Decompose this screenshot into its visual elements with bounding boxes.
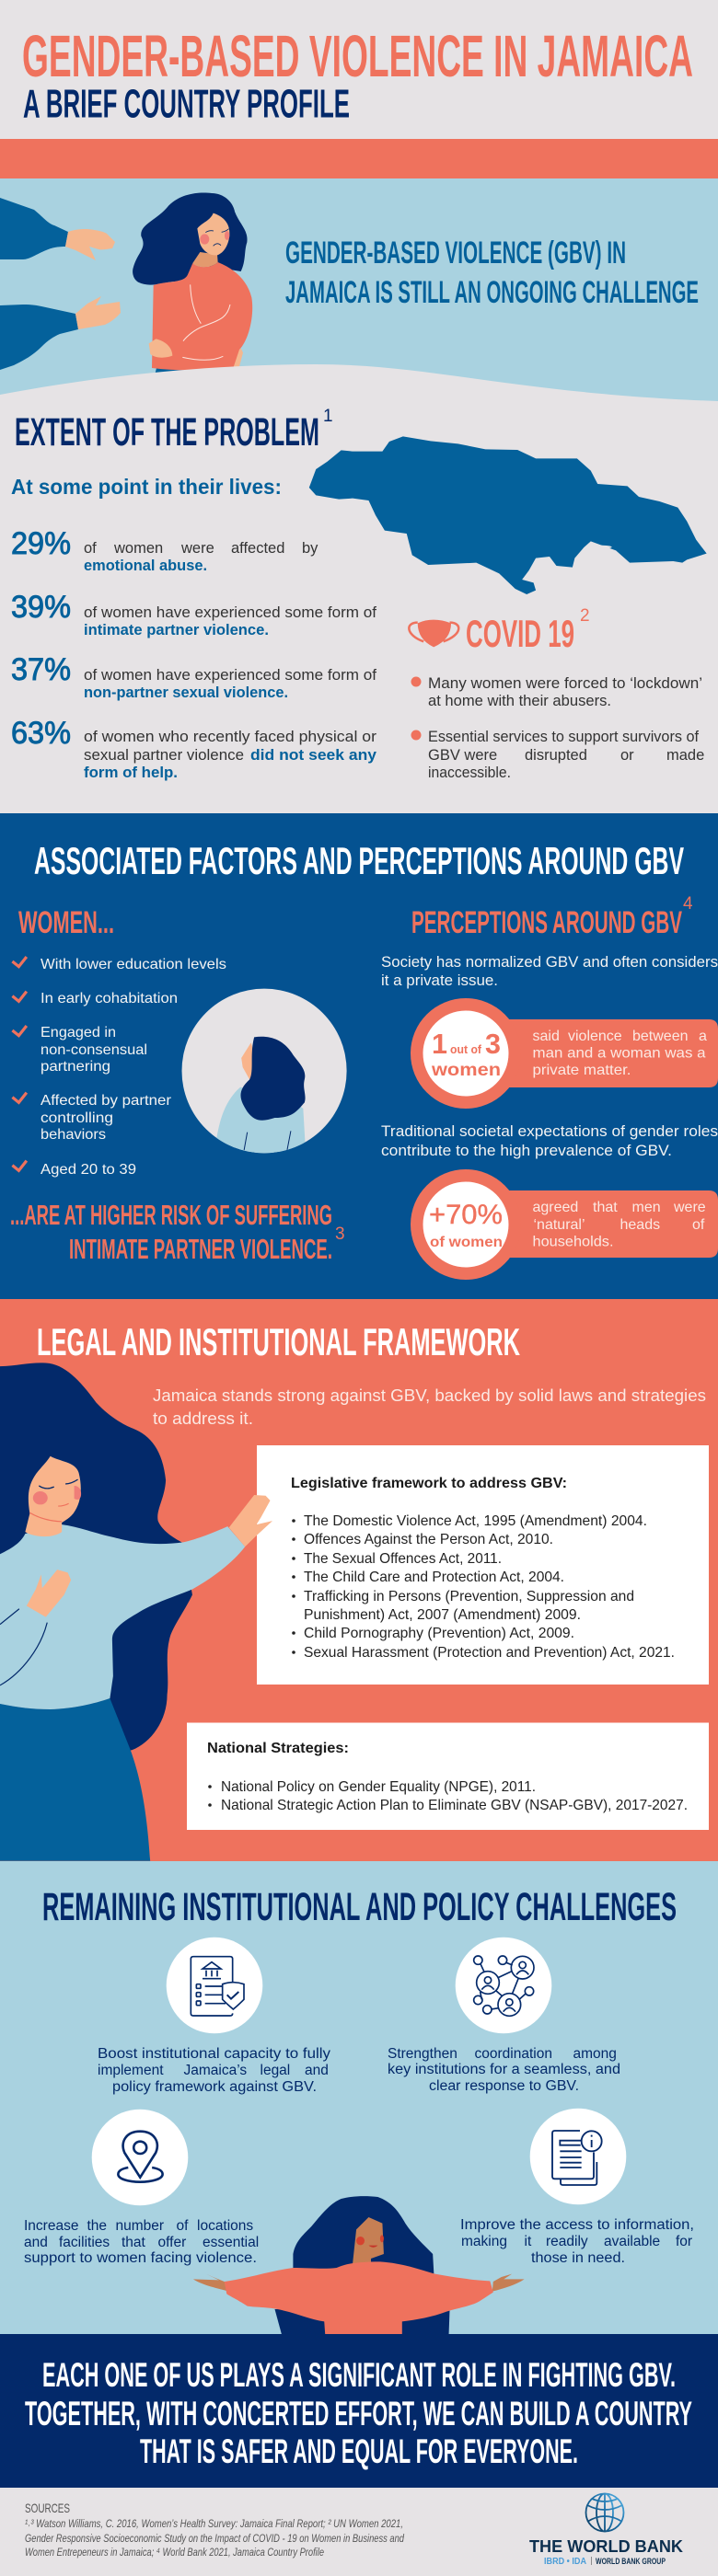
wave divider (0, 364, 718, 410)
panel: closing statement (0, 2334, 718, 2488)
heading: extent of the problem: 1 (323, 407, 333, 426)
stat: 29%: emotional abuse. (84, 558, 207, 574)
panel: associated factors and perceptions (0, 813, 718, 1299)
covid bullet 2: inaccessible. (428, 765, 511, 781)
text: boost capacity: policy framework against GBV. (112, 2079, 317, 2095)
heading: covid 19 (466, 606, 590, 655)
callout: 1 out of 3 women: 3 (485, 1028, 501, 1060)
box: legislative framework (257, 1445, 709, 1685)
text: increase locations: support to women facing violence. (24, 2250, 257, 2266)
illustration: woman in profile (182, 989, 347, 1156)
illustration: standing woman (0, 1363, 272, 1861)
checklist: risk factors: behaviors (41, 1127, 106, 1143)
hero statement (285, 236, 699, 310)
callout: +70% of women: households. (532, 1235, 613, 1249)
intro text: Jamaica stands strong against GBV, backed by solid laws and strategies (153, 1386, 706, 1405)
box: legislative framework: Trafficking in Persons (Prevention, Suppression and (304, 1589, 634, 1604)
stat: 29%: by (302, 540, 318, 557)
icon: location pin (92, 2110, 188, 2205)
text: improve access: it (525, 2234, 532, 2249)
text: increase locations: and (24, 2235, 48, 2250)
covid bullet 1: Many women were forced to ‘lockdown’ (428, 675, 702, 692)
checklist: risk factors: In early cohabitation (41, 991, 178, 1006)
footer: sources: Women Entrepeneurs in Jamaica; ⁴ World Bank 2021, Jamaica Country Profile (25, 2546, 324, 2559)
checklist: risk factors: With lower education levels (41, 957, 226, 972)
stat: 37%: 37% (11, 652, 71, 687)
intro text (153, 1386, 706, 1428)
text: increase locations: the (87, 2218, 107, 2234)
stat: 39%: intimate partner violence. (84, 622, 269, 638)
text: increase locations: offer (158, 2235, 186, 2250)
box: national strategies: National Strategies: (207, 1741, 349, 1756)
risk statement: 3 (335, 1225, 345, 1244)
text: improve access: for (676, 2234, 692, 2249)
callout: 1 out of 3 women: 1 (432, 1028, 447, 1060)
text: increase locations: essential (203, 2235, 259, 2250)
text: increase locations: facilities (59, 2235, 110, 2250)
illustration: reaching arms (0, 198, 121, 370)
logo: the world bank: WORLD BANK GROUP (596, 2557, 666, 2566)
icon: network (456, 1938, 551, 2033)
stat: 39% (11, 590, 376, 638)
text: traditional expectations (381, 1123, 718, 1159)
stat: 37%: of women have experienced some form of (84, 667, 376, 684)
box: legislative framework: The Sexual Offences Act, 2011. (304, 1551, 502, 1567)
icon: globe (585, 2493, 624, 2532)
callout: 1 out of 3 women: man and a woman was a (532, 1045, 706, 1062)
text: improve access: available (604, 2234, 660, 2249)
covid bullet 2 (411, 729, 704, 781)
checklist: risk factors: Affected by partner (41, 1093, 172, 1109)
stat: 29%: affected (231, 540, 284, 557)
text: increase locations (24, 2218, 259, 2266)
panel: hero (0, 178, 718, 410)
box: legislative framework: The Domestic Violence Act, 1995 (Amendment) 2004. (304, 1513, 647, 1529)
stat: 63%: of women who recently faced physical or (84, 729, 377, 745)
stat: 29%: women (113, 540, 163, 557)
illustration: woman with open arms (193, 2196, 525, 2334)
callout: 1 out of 3 women: said (532, 1029, 560, 1044)
covid bullet 2: or (620, 747, 634, 764)
heading: covid 19: 2 (580, 606, 590, 626)
text: improve access (460, 2217, 694, 2266)
icon: face mask (409, 620, 458, 647)
icon: information document (530, 2109, 626, 2204)
text: traditional expectations: Traditional societal expectations of gender roles (381, 1123, 718, 1140)
callout: 1 out of 3 women (411, 998, 718, 1109)
covid bullet 2: disrupted (525, 747, 587, 764)
checklist: risk factors: Engaged in (41, 1025, 116, 1041)
icons: check marks (12, 957, 27, 1170)
covid bullet 1 (411, 675, 702, 709)
illustration: sad woman (133, 192, 252, 378)
callout: +70% of women: of (692, 1217, 705, 1233)
text: improve access: Improve the access to information, (460, 2217, 694, 2233)
checklist: risk factors: controlling (41, 1110, 113, 1126)
heading: perceptions around gbv: 4 (683, 894, 693, 914)
subtitle: A BRIEF COUNTRY PROFILE (23, 81, 350, 127)
coral band (0, 139, 718, 178)
logo: the world bank: THE WORLD BANK (529, 2536, 684, 2556)
stat: 37%: non-partner sexual violence. (84, 684, 288, 701)
footer: sources: SOURCES (25, 2501, 70, 2515)
box: legislative framework: Sexual Harassment (Protection and Prevention) Act, 2021. (304, 1645, 675, 1661)
text: improve access: making (461, 2234, 507, 2249)
text: boost capacity: Jamaica’s (184, 2063, 247, 2078)
heading: women: WOMEN... (18, 905, 114, 940)
text: boost capacity (98, 2046, 330, 2095)
checklist: risk factors: non-consensual (41, 1042, 147, 1058)
text: strengthen coordination (388, 2046, 620, 2094)
footer: sources: ¹˒³ Watson Williams, C. 2016, Women’s Health Survey: Jamaica Final Report; ² UN Women 2021, (25, 2517, 403, 2530)
covid bullet 2: GBV were (428, 747, 497, 764)
stat: 39%: of women have experienced some form of (84, 604, 376, 621)
callout: 1 out of 3 women: private matter. (532, 1063, 631, 1078)
panel: legal and institutional framework (0, 1299, 718, 1861)
panel: remaining challenges (0, 1861, 718, 2334)
box: legislative framework: The Child Care and Protection Act, 2004. (304, 1570, 564, 1585)
text: increase locations: of (177, 2218, 189, 2234)
logo: the world bank (529, 2493, 684, 2567)
text: strengthen coordination: Strengthen (388, 2046, 457, 2062)
text: increase locations: locations (197, 2218, 253, 2234)
callout: 1 out of 3 women: violence (568, 1029, 622, 1044)
box: national strategies (187, 1722, 709, 1830)
text: improve access: those in need. (531, 2250, 625, 2266)
panel: extent of the problem (11, 407, 707, 781)
callout: 1 out of 3 women: between (632, 1029, 689, 1044)
icon: institutional checklist (167, 1938, 262, 2033)
text: increase locations: Increase (24, 2218, 78, 2234)
footer: sources (25, 2501, 404, 2559)
heading: extent of the problem (15, 407, 333, 454)
callout: +70% of women: that (593, 1200, 618, 1215)
callout: +70% of women: +70% (429, 1200, 503, 1230)
intro text: to address it. (153, 1409, 253, 1428)
box: legislative framework: Punishment) Act, 2007 (Amendment) 2009. (304, 1607, 581, 1623)
callout: +70% of women: were (673, 1200, 706, 1215)
checklist: risk factors (12, 957, 226, 1178)
callout: +70% of women: heads (620, 1217, 660, 1233)
covid bullet 2: Essential services to support survivors of (428, 729, 699, 745)
covid bullet 1: at home with their abusers. (428, 693, 611, 709)
subheading: At some point in their lives: (11, 475, 282, 499)
box: national strategies: National Strategic Action Plan to Eliminate GBV (NSAP-GBV), 2017-2027. (221, 1798, 688, 1813)
map of Jamaica (309, 436, 707, 594)
stat: 29%: of (84, 540, 97, 557)
text: strengthen coordination: clear response to GBV. (429, 2078, 579, 2094)
text: traditional expectations: contribute to the high prevalence of GBV. (381, 1143, 672, 1159)
stat: 29% (11, 526, 318, 574)
checklist: risk factors: Aged 20 to 39 (41, 1162, 136, 1178)
stat: 63%: 63% (11, 716, 71, 751)
text: strengthen coordination: coordination (475, 2046, 552, 2062)
callout: 1 out of 3 women: women (431, 1061, 501, 1080)
callout: 1 out of 3 women: a (699, 1029, 707, 1044)
heading: extent of the problem: EXTENT OF THE PROBLEM (15, 410, 319, 454)
text: boost capacity: legal (260, 2063, 290, 2078)
box: legislative framework: Child Pornography (Prevention) Act, 2009. (304, 1626, 574, 1641)
stat: 37% (11, 652, 376, 701)
risk statement (10, 1199, 345, 1265)
covid bullet 2: made (666, 747, 704, 764)
text: strengthen coordination: among (573, 2046, 617, 2062)
footer: sources: Gender Responsive Socioeconomic Study on the Impact of COVID - 19 on Women in Business and (25, 2532, 404, 2545)
callout: +70% of women: men (631, 1200, 661, 1215)
heading: covid 19: COVID 19 (466, 612, 574, 655)
text: normalized gbv: Society has normalized GBV and often considers (381, 954, 718, 971)
text: boost capacity: Boost institutional capacity to fully (98, 2046, 330, 2062)
text: normalized gbv (381, 954, 718, 989)
stat: 63%: sexual partner violence (84, 747, 244, 764)
text: normalized gbv: it a private issue. (381, 972, 498, 989)
box: legislative framework: Legislative framework to address GBV: (291, 1476, 567, 1491)
text: boost capacity: and (305, 2063, 329, 2078)
stat: 39%: 39% (11, 590, 71, 625)
stat: 29%: were (180, 540, 214, 557)
text: increase locations: number (116, 2218, 164, 2234)
callout: 1 out of 3 women: out of (450, 1042, 482, 1056)
box: national strategies: National Policy on Gender Equality (NPGE), 2011. (221, 1779, 536, 1795)
checklist: risk factors: partnering (41, 1059, 110, 1075)
callout: +70% of women: of women (430, 1235, 503, 1250)
text: increase locations: that (122, 2235, 146, 2250)
stat: 63%: form of help. (84, 765, 178, 781)
callout: +70% of women: agreed (532, 1200, 578, 1215)
text: boost capacity: implement (98, 2063, 164, 2078)
callout: +70% of women (411, 1169, 718, 1280)
logo: the world bank: IBRD • IDA (544, 2557, 586, 2567)
risk statement: INTIMATE PARTNER VIOLENCE. (69, 1233, 332, 1265)
callout: +70% of women: ‘natural’ (534, 1217, 585, 1233)
stat: 29%: 29% (11, 526, 71, 561)
text: improve access: readily (546, 2234, 588, 2249)
box: legislative framework: Offences Against the Person Act, 2010. (304, 1532, 553, 1547)
risk statement: ...ARE AT HIGHER RISK OF SUFFERING (10, 1199, 332, 1231)
stat: 63%: did not seek any (250, 747, 377, 764)
stat: 63% (11, 716, 377, 781)
text: strengthen coordination: key institutions for a seamless, and (388, 2062, 620, 2077)
